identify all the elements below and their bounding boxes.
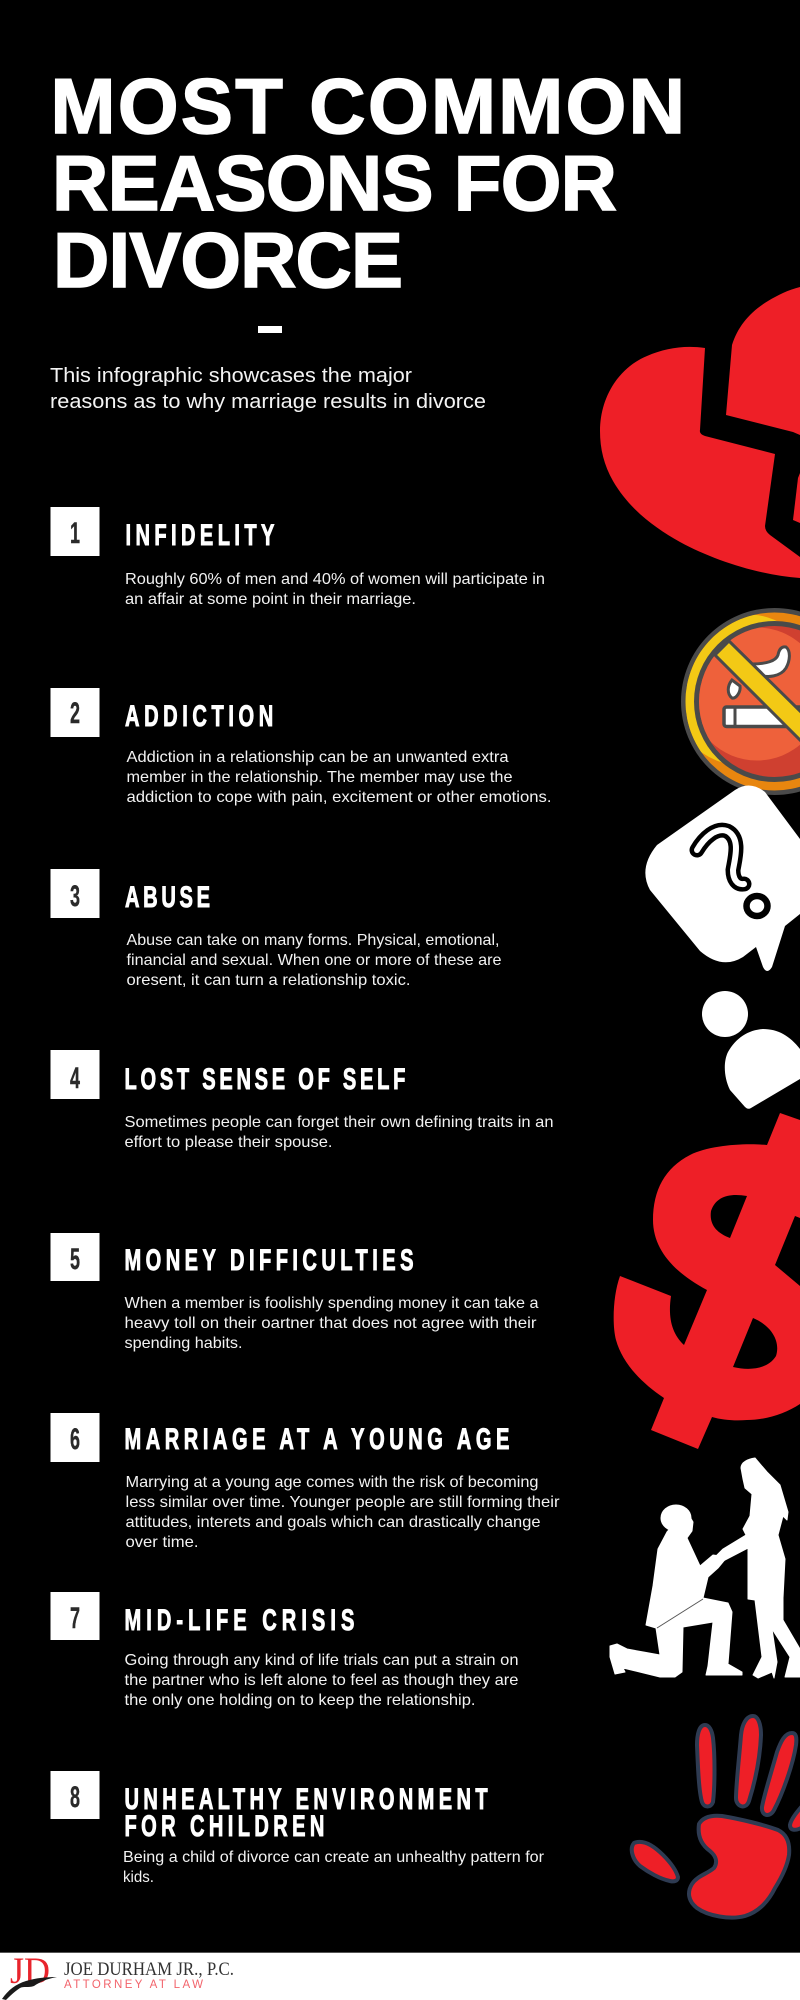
logo mark [2, 1951, 57, 2000]
number badge 2: 2 [70, 697, 80, 730]
number badge 5: 5 [70, 1243, 80, 1276]
heading: unhealthy environment for children [124, 1783, 488, 1843]
description [126, 749, 552, 806]
description [124, 1652, 519, 1709]
heading: mid-life crisis: MID-LIFE CRISIS [124, 1604, 354, 1637]
reason 5 [50, 1233, 539, 1352]
icon: broken heart [600, 287, 800, 578]
description: less similar over time. Younger people are still forming their [126, 1494, 560, 1511]
description: over time. [126, 1534, 198, 1551]
description: heavy toll on their oartner that does not agree with their [124, 1315, 537, 1332]
title: MOST COMMON [50, 62, 685, 150]
heading: marriage at a young age: MARRIAGE AT A YOUNG AGE [124, 1423, 509, 1456]
description: Being a child of divorce can create an unhealthy pattern for [123, 1849, 545, 1866]
reason 6 [50, 1413, 560, 1551]
subtitle: reasons as to why marriage results in divorce [50, 391, 486, 413]
icon: question speech bubble [645, 785, 800, 971]
heading: addiction: ADDICTION [125, 700, 273, 733]
description: Marrying at a young age comes with the risk of becoming [126, 1474, 538, 1491]
number badge 1: 1 [70, 517, 80, 550]
number badge 7 [50, 1592, 100, 1640]
subtitle: This infographic showcases the major [50, 365, 412, 387]
description [125, 571, 545, 608]
number badge 8: 8 [70, 1781, 80, 1814]
reason 1 [50, 507, 545, 608]
description: effort to please their spouse. [124, 1134, 332, 1151]
description: the partner who is left alone to feel as though they are [124, 1672, 519, 1689]
description: When a member is foolishly spending money it can take a [124, 1295, 539, 1312]
number badge 8 [50, 1771, 100, 1819]
icon: red handprint [632, 1716, 800, 1918]
description: attitudes, interets and goals which can drastically change [126, 1514, 541, 1531]
title accent dash [258, 326, 282, 333]
number badge 4 [50, 1050, 100, 1099]
reason 8 [50, 1771, 545, 1886]
reason 4 [50, 1050, 554, 1151]
title: REASONS FOR [52, 139, 617, 227]
logo mark: JD [10, 1951, 50, 1992]
description: Sometimes people can forget their own defining traits in an [124, 1114, 554, 1131]
description: member in the relationship. The member may use the [126, 769, 513, 786]
icon: no smoking sign [669, 608, 800, 795]
number badge 3: 3 [70, 880, 80, 913]
description: oresent, it can turn a relationship toxic. [126, 972, 410, 989]
heading: abuse: ABUSE [125, 881, 210, 914]
reason 3 [50, 869, 502, 989]
description: Addiction in a relationship can be an unwanted extra [126, 749, 509, 766]
description: Roughly 60% of men and 40% of women will participate in [125, 571, 545, 588]
heading: unhealthy environment for children: UNHEALTHY ENVIRONMENT [124, 1783, 488, 1816]
icon: marriage proposal silhouette [610, 1458, 800, 1678]
firm tagline: ATTORNEY AT LAW [64, 1979, 203, 1991]
number badge 2 [50, 688, 100, 737]
title [50, 62, 685, 304]
description: kids. [123, 1869, 154, 1886]
heading: money difficulties: MONEY DIFFICULTIES [124, 1244, 414, 1277]
description: addiction to cope with pain, excitement or other emotions. [126, 789, 552, 806]
description [123, 1849, 545, 1886]
number badge 1 [50, 507, 100, 556]
number badge 4: 4 [70, 1062, 80, 1095]
subtitle [50, 365, 486, 413]
description: Abuse can take on many forms. Physical, emotional, [126, 932, 500, 949]
heading: infidelity: INFIDELITY [126, 519, 275, 552]
title: DIVORCE [53, 216, 403, 304]
description: spending habits. [124, 1335, 242, 1352]
firm name: JOE DURHAM JR., P.C. [64, 1960, 234, 1980]
number badge 5 [50, 1233, 100, 1281]
number badge 6: 6 [70, 1423, 80, 1456]
description: an affair at some point in their marriage. [125, 591, 416, 608]
number badge 7: 7 [70, 1602, 80, 1635]
reason 2 [50, 688, 552, 806]
description: Going through any kind of life trials can put a strain on [124, 1652, 518, 1669]
heading: unhealthy environment for children: FOR CHILDREN [124, 1810, 324, 1843]
icon: person [702, 991, 800, 1109]
number badge 6 [50, 1413, 100, 1462]
reason 7 [50, 1592, 519, 1709]
number badge 3 [50, 869, 100, 918]
footer band [0, 1951, 800, 2000]
description: the only one holding on to keep the relationship. [124, 1692, 476, 1709]
heading: lost sense of self: LOST SENSE OF SELF [124, 1063, 405, 1096]
description [124, 1114, 554, 1151]
description: financial and sexual. When one or more of these are [126, 952, 502, 969]
description [126, 932, 502, 989]
icon: dollar sign [614, 1113, 800, 1449]
description [124, 1295, 539, 1352]
description [126, 1474, 560, 1551]
